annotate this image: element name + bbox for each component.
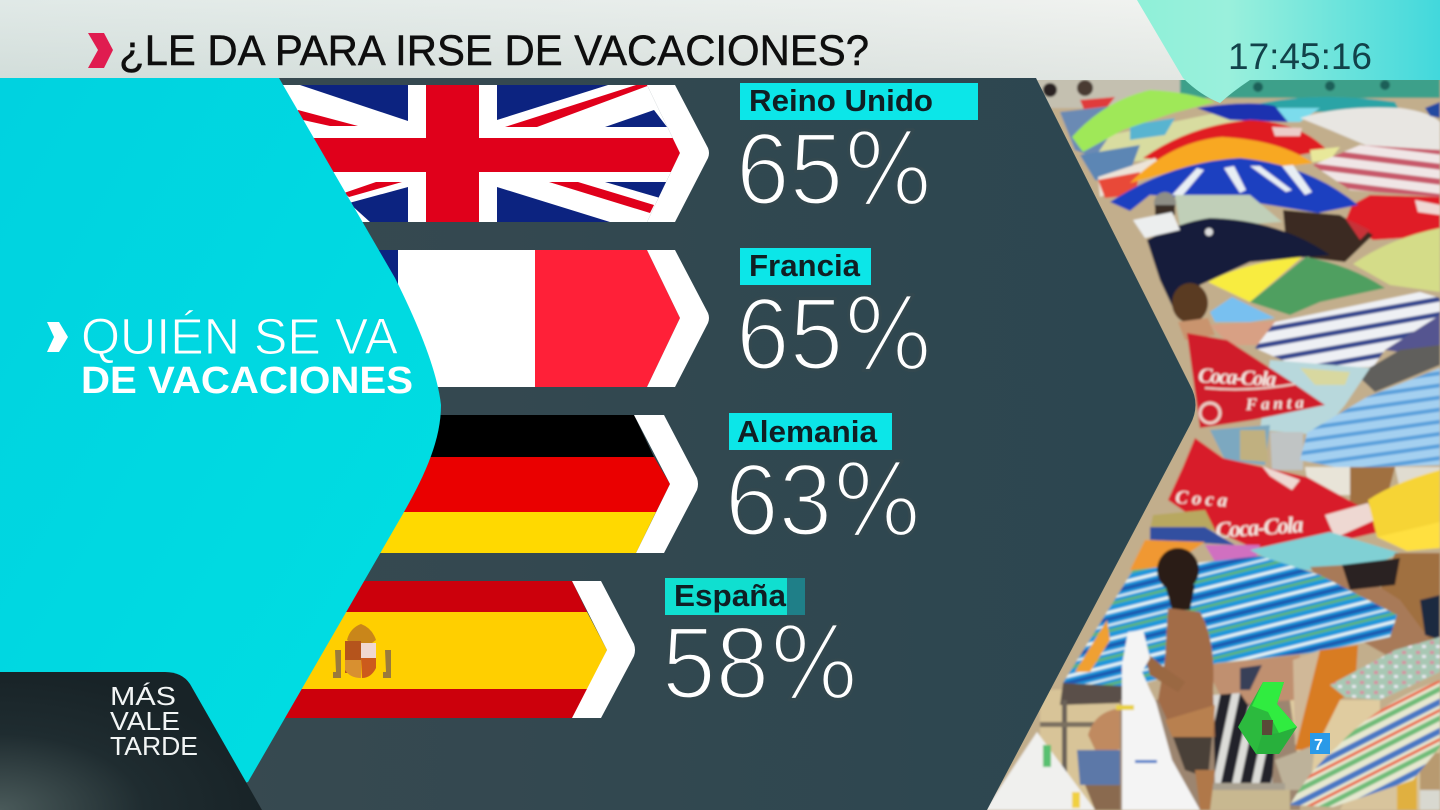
value: España 58%: 58% — [662, 605, 859, 722]
clock: 17:45:16 — [1228, 36, 1372, 77]
logo: laSexta — [1238, 682, 1297, 754]
title chevron icon — [88, 33, 113, 68]
value: Reino Unido 65%: 65% — [736, 111, 933, 228]
flag: Reino Unido — [270, 85, 709, 222]
title: ¿LE DA PARA IRSE DE VACACIONES? — [119, 27, 869, 75]
icon: white chevron — [47, 322, 68, 352]
photo: beach umbrellas: Coca — [1175, 487, 1228, 512]
section title line 2: DE VACACIONES — [81, 360, 413, 402]
photo: beach umbrellas: Coca-Cola — [1215, 512, 1304, 543]
label: Francia: Francia — [749, 248, 861, 283]
icon: Spanish coat of arms — [333, 624, 391, 678]
photo: beach umbrellas: Fanta — [1244, 393, 1305, 414]
flag: España — [280, 581, 635, 718]
label: España: España — [674, 578, 787, 613]
value: Alemania 63%: 63% — [725, 442, 922, 559]
icon: channel number 7: 7 — [1314, 737, 1323, 754]
value: Francia 65%: 65% — [736, 276, 933, 393]
photo: beach umbrellas — [980, 70, 1440, 810]
logo: Más Vale Tarde: MÁS — [110, 681, 176, 711]
panel: cyan section title — [0, 78, 441, 810]
dark panel — [0, 78, 1196, 810]
icon: channel number 7 — [1310, 733, 1330, 754]
photo: beach umbrellas: Coca-Cola — [1198, 363, 1277, 391]
flag: Alemania — [375, 415, 698, 553]
label: Alemania: Alemania — [737, 414, 878, 449]
teal corner — [1137, 0, 1440, 103]
top bar — [0, 0, 1440, 80]
label: Reino Unido: Reino Unido — [749, 83, 933, 118]
logo: Más Vale Tarde: TARDE — [110, 731, 198, 761]
section title line 1: QUIÉN SE VA — [81, 308, 398, 365]
logo: Más Vale Tarde: VALE — [110, 706, 180, 736]
flag: Francia — [375, 250, 709, 387]
logo: Más Vale Tarde — [0, 672, 262, 810]
